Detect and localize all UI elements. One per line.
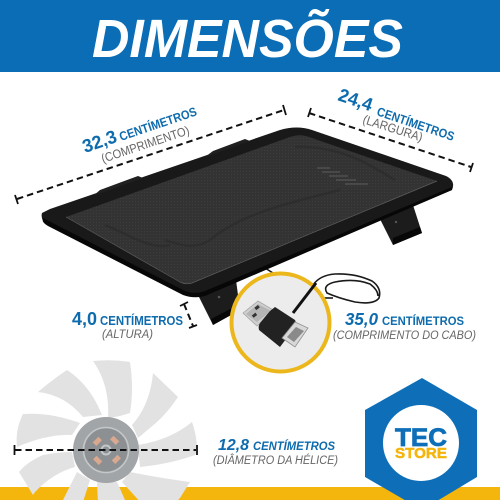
dimension text: height: 4,0	[72, 309, 97, 329]
icon: cooling fan	[17, 360, 197, 500]
dimension text: cable	[333, 309, 476, 342]
yellow footer band	[0, 487, 500, 500]
dimension text: fan diameter: (DIÂMETRO DA HÉLICE)	[213, 454, 338, 467]
dimension text: length: (COMPRIMENTO)	[100, 123, 191, 166]
cooler stand legs	[199, 205, 422, 325]
cooler body	[42, 128, 453, 297]
USB connector callout	[232, 274, 330, 372]
dimension text: fan diameter	[213, 437, 338, 467]
dimension text: fan diameter: CENTÍMETROS	[253, 438, 335, 453]
dimension text: length: CENTÍMETROS	[117, 104, 199, 144]
dimension text: cable: CENTÍMETROS	[382, 313, 464, 328]
dimension text: height: CENTÍMETROS	[100, 313, 183, 328]
dimension line: width	[308, 108, 473, 172]
dimension text: cable: 35,0	[345, 309, 378, 329]
logo: Tec Store hexagon: TEC	[395, 424, 447, 452]
dimension text: length: 32,3	[79, 126, 119, 157]
dimension text: length	[79, 104, 199, 166]
dimension text: height: (ALTURA)	[102, 327, 153, 341]
title banner	[0, 0, 500, 72]
dimension text: height	[72, 309, 183, 341]
dimension text: fan diameter: 12,8	[218, 437, 249, 454]
title banner: DIMENSÕES	[92, 9, 403, 69]
logo: Tec Store hexagon: STORE	[395, 445, 447, 462]
dimension text: width: 24,4	[336, 84, 376, 115]
dimension line: length	[15, 105, 286, 204]
dimension text: width	[336, 84, 457, 145]
dimension text: cable: (COMPRIMENTO DO CABO)	[333, 328, 476, 342]
dimension line: fan diameter	[14, 445, 197, 455]
USB cable loop	[265, 268, 380, 303]
dimension text: width: (LARGURA)	[361, 113, 424, 145]
dimension line: height	[180, 302, 197, 328]
logo: Tec Store hexagon	[365, 378, 477, 500]
dimension text: width: CENTÍMETROS	[375, 104, 457, 144]
